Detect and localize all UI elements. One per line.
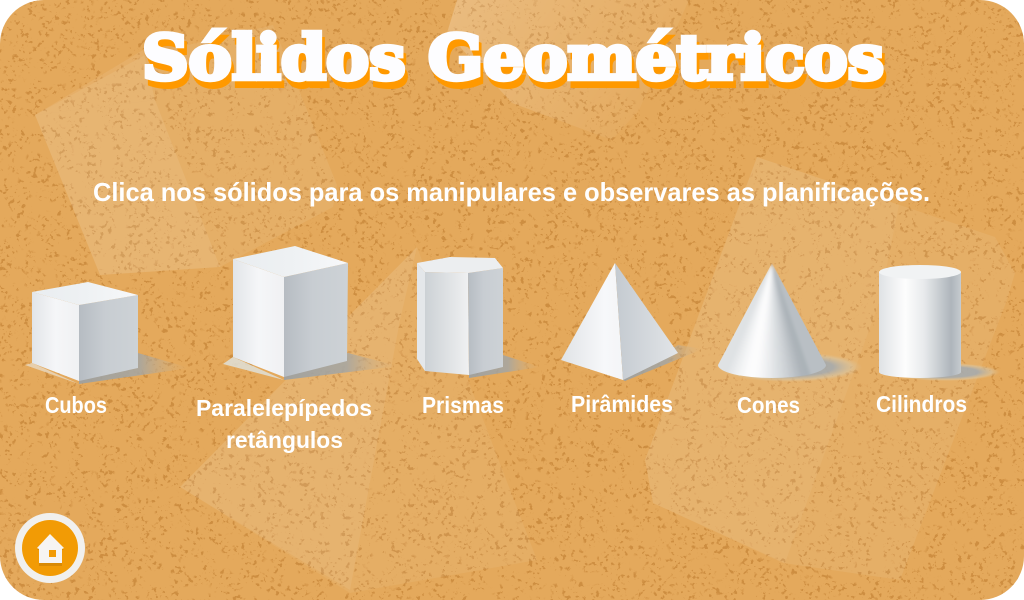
label: Cilindros: Cilindros [876,391,967,417]
label: Paralelepípedos retângulos [196,395,372,453]
label: Paralelepípedos retângulos: Paralelepípedos [196,395,372,421]
translucent net: top left [35,25,337,275]
translucent net: bottom centre [180,247,537,593]
solid: cylinder [879,265,1000,381]
solid: cone [718,264,859,382]
solid: cube [25,282,190,384]
label: Paralelepípedos retângulos: retângulos [226,427,343,453]
label: Prismas: Prismas [422,392,504,418]
instruction text: Clica nos sólidos para os manipulares e observares as planificações. [93,177,930,207]
label: Pirâmides: Pirâmides [571,391,673,417]
translucent net: right [645,157,1015,580]
label: Cubos: Cubos [45,392,107,418]
solid: pyramid [561,263,703,381]
solid: prism [417,257,540,378]
translucent net: top centre [447,0,689,140]
title: Sólidos Geométricos [142,21,884,94]
solid: rectangular parallelepiped [223,246,398,380]
title: Sólidos Geométricos [145,28,887,101]
label: Cones: Cones [737,392,800,418]
icon: home button [15,513,85,583]
